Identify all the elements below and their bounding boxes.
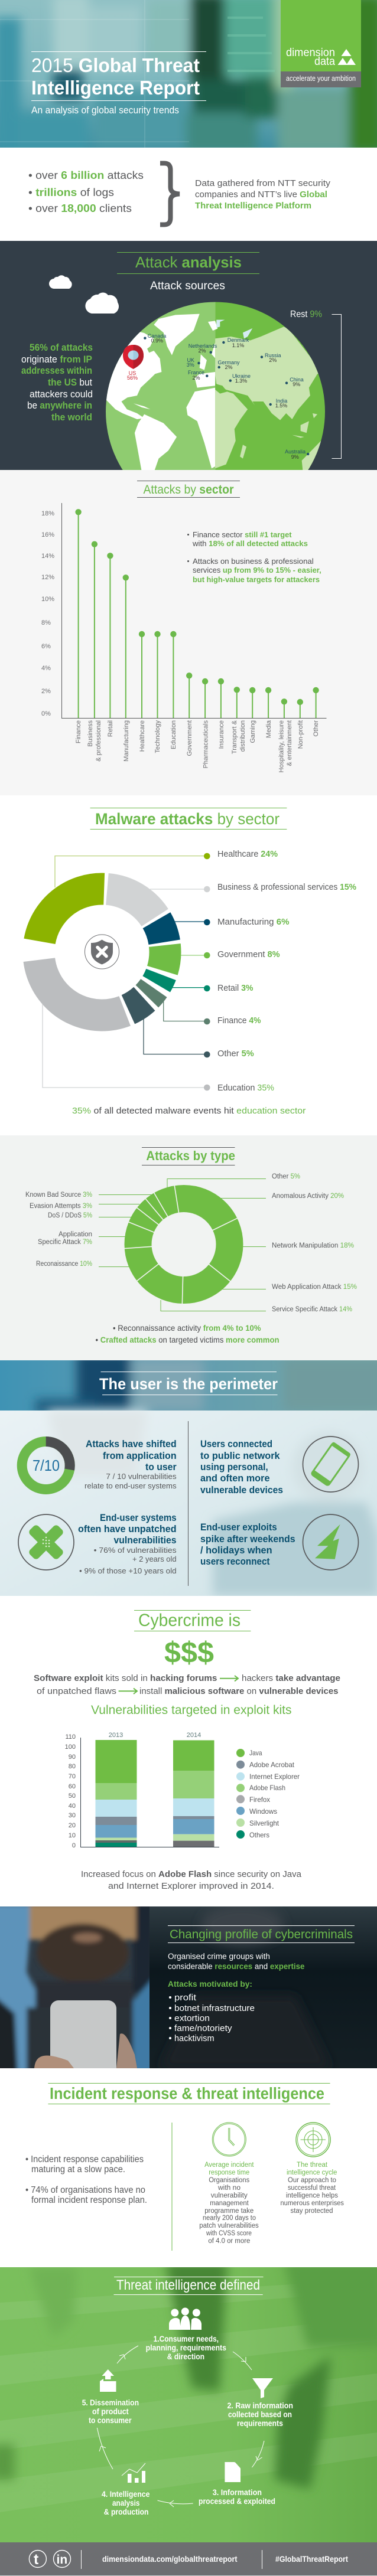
- text: users connected: Users connected: [200, 1439, 272, 1449]
- step 4 text: [102, 2489, 150, 2516]
- text: end-user systems: + 2 years old: [132, 1555, 177, 1563]
- incident bullets: formal incident response plan.: [31, 2195, 147, 2205]
- donut: 7 of 10: [22, 1442, 70, 1489]
- criminals description: [168, 1952, 305, 1989]
- panel: attack analysis background: [0, 241, 377, 470]
- text: attacks have shifted: relate to end-user systems: [84, 1481, 177, 1490]
- world globe map: Ukraine: [232, 373, 251, 379]
- footer bar: #GlobalThreatReport: [275, 2554, 348, 2564]
- cybercrime explanation: install malicious software on vulnerable devices: [139, 1686, 338, 1696]
- text: average incident response time: vulnerability: [211, 2192, 248, 2199]
- malware legend: Other 5%: [217, 1049, 254, 1059]
- text: threat intelligence cycle: intelligence cycle: [287, 2169, 337, 2176]
- world globe map: 9%: [292, 381, 300, 387]
- attack type findings: [96, 1324, 279, 1344]
- step 1 text: planning, requirements: [146, 2343, 226, 2352]
- icon: US location pin: US: [129, 370, 136, 376]
- icon: twitter: t: [34, 2551, 39, 2568]
- lollipop chart: attacks by sector: 4%: [41, 665, 51, 672]
- text: users connected: using personal,: [200, 1462, 268, 1473]
- logo panel: accelerate your ambition: [286, 74, 356, 83]
- world globe map: 9%: [291, 454, 299, 460]
- step 1 text: & direction: [167, 2352, 204, 2361]
- chart legend: Silverlight: [249, 1819, 280, 1827]
- text: average incident response time: response time: [209, 2169, 249, 2176]
- heading: changing profile: Changing profile of cybercriminals: [170, 1927, 353, 1941]
- lollipop chart: attacks by sector: 10%: [41, 596, 54, 603]
- text: end-user systems: [78, 1513, 177, 1575]
- step 2 text: [227, 2401, 293, 2428]
- text: average incident response time: Organisations: [209, 2177, 249, 2184]
- world globe map: France: [188, 370, 204, 376]
- attack type labels: Reconaissance 10%: [36, 1261, 92, 1268]
- map markers: [144, 337, 309, 455]
- stacked bar chart: 10: [69, 1832, 76, 1839]
- stacked bar chart: 40: [69, 1803, 76, 1810]
- icon: US location pin: 56%: [127, 375, 138, 381]
- malware legend: Retail 3%: [217, 983, 253, 993]
- stacked bar chart: 110: [65, 1733, 76, 1741]
- lollipop chart: attacks by sector: & entertainment: [286, 720, 293, 766]
- key data bullets: • trillions of logs: [28, 186, 114, 198]
- icon: US location pin: [123, 345, 144, 381]
- world globe map: 2%: [198, 348, 206, 354]
- panel: cybercriminal dark background: [150, 1904, 377, 2068]
- text: end-user systems: • 9% of those +10 years old: [79, 1566, 177, 1575]
- step 1 text: [146, 2334, 226, 2361]
- step 5 text: of product: [92, 2407, 129, 2416]
- attack type labels: Web Application Attack 15%: [272, 1284, 357, 1291]
- key data bullets: • over 18,000 clients: [28, 202, 132, 214]
- stacked bar chart: 20: [69, 1822, 76, 1829]
- stacked bar chart: 50: [69, 1793, 76, 1800]
- stacked bar chart: 70: [69, 1773, 76, 1780]
- lollipop chart: attacks by sector: Hospitality, leisure: [278, 720, 285, 772]
- sector key findings: with 18% of all detected attacks: [192, 539, 308, 548]
- lollipop chart: attacks by sector: 14%: [41, 553, 54, 560]
- cybercrime explanation: of unpatched flaws: [37, 1686, 116, 1696]
- world globe map: UK: [187, 357, 194, 363]
- attack type labels: Known Bad Source 3%: [25, 1191, 92, 1199]
- lollipop chart: attacks by sector: 12%: [41, 574, 54, 581]
- panel: malware background: [0, 795, 377, 1135]
- logo panel: dimension: [286, 47, 335, 59]
- arrow: step 5 to 1: [117, 2346, 138, 2363]
- icon: shield with cross: [85, 935, 119, 969]
- lollipop chart: attacks by sector: Other: [313, 720, 320, 737]
- lollipop chart: attacks by sector: 18%: [41, 510, 54, 517]
- icon: linkedin: in: [57, 2553, 67, 2567]
- incident bullets: • 74% of organisations have no: [25, 2185, 145, 2195]
- data source text: companies and NTT’s live Global: [195, 190, 327, 200]
- text: average incident response time: Average incident: [204, 2162, 254, 2169]
- cybercrime explanation: Software exploit kits sold in hacking forums: [34, 1673, 217, 1683]
- lollipop chart: attacks by sector: distribution: [239, 720, 246, 752]
- lollipop chart: attacks by sector: 0%: [41, 710, 51, 717]
- heading: attack sources: Attack sources: [150, 280, 225, 292]
- attack type findings: • Reconnaissance activity from 4% to 10%: [113, 1324, 261, 1333]
- sector key findings: but high-value targets for attackers: [193, 575, 320, 584]
- text: end-user systems: End-user systems: [100, 1513, 177, 1523]
- world globe map: India: [276, 398, 287, 404]
- icon: twitter: [29, 2551, 46, 2568]
- world globe map: 2%: [269, 357, 277, 363]
- sector key findings: [187, 530, 321, 584]
- step 2 text: requirements: [237, 2418, 283, 2428]
- heading: attacks by type: Attacks by type: [146, 1148, 235, 1163]
- attack type labels: Other 5%: [272, 1173, 300, 1180]
- text: threat intelligence cycle: The threat: [297, 2162, 328, 2169]
- chart note: Increased focus on Adobe Flash since security on Java: [81, 1869, 302, 1879]
- lollipop chart: attacks by sector: & professional: [95, 720, 102, 762]
- world globe map: Australia: [285, 449, 306, 455]
- step 3 text: [199, 2487, 275, 2506]
- lollipop chart: attacks by sector: Technology: [154, 720, 161, 753]
- motivations list: extortion: [174, 2013, 210, 2023]
- lollipop chart: attacks by sector: Non-profit: [297, 720, 304, 749]
- malware legend: Government 8%: [217, 949, 280, 959]
- icon: people: [169, 2307, 202, 2330]
- motivations list: fame/notoriety: [174, 2023, 232, 2033]
- heading: the user is the perimeter: The user is the perimeter: [99, 1375, 278, 1393]
- text: end-user exploits: End-user exploits: [200, 1522, 277, 1533]
- attack type labels: Specific Attack 7%: [38, 1239, 92, 1246]
- panel: user perimeter background photo: [0, 1352, 377, 1596]
- world globe map: China: [290, 377, 304, 383]
- donut chart: malware by sector: [12, 863, 191, 1041]
- icon: small cloud: [49, 275, 72, 289]
- text: attacks have shifted: [84, 1439, 177, 1490]
- incident bullets: [25, 2154, 147, 2205]
- rest 9% bracket: Rest 9%: [290, 309, 322, 319]
- attack type labels: DoS / DDoS 5%: [48, 1212, 92, 1219]
- motivations list: hacktivism: [174, 2033, 214, 2043]
- step 2 text: 2. Raw information: [227, 2401, 293, 2410]
- world globe map: Canada: [148, 333, 166, 339]
- text: end-user exploits: spike after weekends: [200, 1534, 295, 1545]
- text: users connected: to public network: [200, 1451, 280, 1461]
- divider: [188, 1421, 189, 1586]
- step 5 text: 5. Dissemination: [82, 2398, 139, 2407]
- chart legend: Internet Explorer: [249, 1772, 300, 1781]
- malware legend: Business & professional services 15%: [217, 882, 356, 892]
- data source text: Threat Intelligence Platform: [195, 201, 311, 211]
- lollipop chart: attacks by sector: [41, 503, 326, 772]
- stacked bar chart: 2013: [109, 1732, 123, 1739]
- attack type labels: Evasion Attempts 3%: [30, 1203, 92, 1210]
- step 3 text: processed & exploited: [199, 2496, 275, 2506]
- divider: [171, 2123, 173, 2251]
- icon: dollar signs: $$$: [164, 1636, 214, 1669]
- world globe map: Netherlands: [188, 343, 217, 349]
- sector key findings: Finance sector still #1 target: [193, 530, 292, 539]
- heading: vulnerabilities targeted: Vulnerabilities targeted in exploit kits: [91, 1703, 292, 1717]
- text: threat intelligence cycle: numerous enterprises: [280, 2200, 344, 2207]
- title: Intelligence Report: [31, 77, 200, 99]
- logo panel: data: [314, 55, 335, 68]
- malware legend: Manufacturing 6%: [217, 917, 290, 927]
- chart note: and Internet Explorer improved in 2014.: [108, 1881, 274, 1891]
- lollipop chart: attacks by sector: Business: [87, 720, 94, 747]
- title: [31, 52, 206, 116]
- heading: attack analysis: Attack analysis: [135, 253, 242, 271]
- icon: target: [296, 2123, 330, 2157]
- heading: cybercrime is: Cybercrime is: [138, 1611, 240, 1630]
- stacked bar chart: 60: [69, 1783, 76, 1790]
- stacked bar chart: [65, 1732, 219, 1849]
- arrow: step 1 to 2: [233, 2352, 252, 2370]
- text: attacks have shifted: from application: [103, 1451, 177, 1461]
- sector key findings: Attacks on business & professional: [193, 557, 314, 566]
- criminals description: considerable resources and expertise: [168, 1962, 305, 1971]
- sector key findings: services up from 9% to 15% - easier,: [193, 566, 321, 574]
- chart legend: Firefox: [249, 1795, 270, 1804]
- world globe map: 2%: [225, 364, 233, 370]
- step 5 text: [82, 2398, 139, 2425]
- text: users connected: [200, 1439, 283, 1496]
- lollipop chart: attacks by sector: Insurance: [218, 720, 225, 749]
- lollipop chart: attacks by sector: 8%: [41, 619, 51, 626]
- step 4 text: 4. Intelligence: [102, 2489, 150, 2499]
- text: end-user systems: often have unpatched: [78, 1524, 177, 1535]
- text: average incident response time: [199, 2162, 259, 2245]
- step 4 text: analysis: [112, 2498, 140, 2508]
- key data bullets: • over 6 billion attacks: [28, 169, 144, 181]
- lollipop chart: attacks by sector: Government: [186, 720, 193, 756]
- text: threat intelligence cycle: Our approach to: [288, 2177, 336, 2184]
- chart legend: Adobe Acrobat: [249, 1761, 295, 1769]
- callout: 56% of attacks: addresses within: [21, 365, 92, 376]
- attack type findings: • Crafted attacks on targeted victims more common: [96, 1336, 279, 1344]
- malware legend: [204, 849, 356, 1093]
- text: users connected: and often more: [200, 1473, 269, 1484]
- data source text: Data gathered from NTT security: [195, 179, 331, 188]
- lollipop chart: attacks by sector: Manufacturing: [123, 720, 130, 762]
- chart note: [81, 1869, 302, 1891]
- stacked bar chart: 100: [65, 1744, 76, 1751]
- donut chart: attacks by type: [99, 1178, 266, 1311]
- icon: upload box: [100, 2369, 116, 2392]
- text: attacks have shifted: Attacks have shifted: [86, 1439, 177, 1449]
- text: users connected: vulnerable devices: [200, 1485, 283, 1496]
- leader lines: [43, 856, 207, 1088]
- callout: 56% of attacks: the US but: [48, 377, 92, 388]
- lollipop chart: attacks by sector: Pharmaceuticals: [202, 720, 209, 768]
- text: average incident response time: programme take: [204, 2208, 254, 2215]
- step 2 text: collected based on: [228, 2410, 292, 2419]
- cybercrime explanation: hackers take advantage: [242, 1673, 340, 1683]
- arrow: step 3 to 4: [157, 2500, 193, 2507]
- panel: cybercriminal photo: [0, 1906, 150, 2068]
- text: end-user exploits: users reconnect: [200, 1556, 270, 1567]
- text: average incident response time: management: [210, 2200, 249, 2207]
- panel: attacks by sector background: [0, 470, 377, 795]
- title: An analysis of global security trends: [31, 105, 179, 116]
- step 1 text: 1.Consumer needs,: [154, 2334, 219, 2343]
- attack type labels: [25, 1173, 357, 1313]
- world globe map: Denmark: [228, 337, 249, 343]
- attack type labels: Application: [58, 1231, 92, 1238]
- world globe map: [106, 302, 325, 470]
- lollipop chart: attacks by sector: Education: [170, 720, 177, 749]
- lollipop chart: attacks by sector: Retail: [107, 720, 114, 737]
- lollipop chart: attacks by sector: Healthcare: [139, 720, 146, 752]
- icon: lightning bolt: [303, 1514, 358, 1570]
- criminals description: Attacks motivated by:: [168, 1979, 252, 1989]
- motivations list: [169, 1993, 255, 2043]
- footer bar: [0, 2542, 377, 2576]
- heading: attack analysis: [117, 253, 259, 274]
- world globe map: 1.1%: [232, 342, 244, 348]
- callout: 56% of attacks: [21, 342, 93, 423]
- text: threat intelligence cycle: intelligence helps: [286, 2192, 338, 2199]
- text: average incident response time: of 4.0 or more: [208, 2238, 250, 2245]
- icon: analytics chart: [122, 2463, 145, 2483]
- donut: 7 of 10: 7/10: [32, 1457, 60, 1474]
- heading: malware attacks by sector: Malware attacks by sector: [95, 810, 280, 828]
- icon: large cloud: [85, 292, 119, 314]
- icon: document: [225, 2462, 240, 2482]
- world globe map: Germany: [217, 360, 240, 365]
- cybercrime explanation: [34, 1673, 340, 1696]
- footer bar: dimensiondata.com/globalthreatreport: [102, 2554, 238, 2564]
- chart legend: Windows: [249, 1807, 277, 1816]
- step 4 text: & production: [104, 2507, 149, 2516]
- chart legend: Others: [249, 1831, 269, 1839]
- incident bullets: • Incident response capabilities: [25, 2154, 144, 2164]
- world globe map: 3%: [187, 362, 194, 368]
- text: end-user systems: • 76% of vulnerabilities: [94, 1546, 177, 1555]
- malware legend: Healthcare 24%: [217, 849, 278, 859]
- text: end-user systems: vulnerabilities: [113, 1535, 176, 1546]
- callout: 56% of attacks: attackers could: [30, 389, 93, 400]
- icon: funnel: [252, 2378, 273, 2398]
- chart legend: [236, 1749, 300, 1839]
- arrow: step 4 to 5: [97, 2428, 113, 2469]
- world globe map: Russia: [265, 352, 281, 358]
- lollipop chart: attacks by sector: Finance: [75, 720, 82, 743]
- motivations list: botnet infrastructure: [174, 2003, 255, 2013]
- text: attacks have shifted: to user: [145, 1462, 177, 1473]
- icon: smartphone: [303, 1436, 358, 1492]
- stacked bar chart: 90: [69, 1754, 76, 1761]
- text: average incident response time: nearly 200 days to: [203, 2215, 256, 2222]
- icon: curly brace: [160, 163, 180, 224]
- text: threat intelligence cycle: successful threat: [288, 2185, 336, 2192]
- callout: 56% of attacks: be anywhere in: [27, 400, 92, 411]
- panel: attacks by type background: [0, 1135, 377, 1360]
- lollipop chart: attacks by sector: Media: [265, 720, 272, 738]
- lollipop chart: attacks by sector: Transport &: [231, 720, 238, 754]
- malware takeaway: 35% of all detected malware events hit education sector: [72, 1106, 306, 1116]
- stacked bar chart: 0: [72, 1842, 76, 1849]
- world globe map: 1.3%: [235, 378, 247, 384]
- stacked bar chart: 80: [69, 1763, 76, 1770]
- attack type labels: Anomalous Activity 20%: [272, 1193, 344, 1200]
- icon: linkedin: [53, 2551, 71, 2567]
- attack type labels: Network Manipulation 18%: [272, 1242, 354, 1249]
- chart legend: Adobe Flash: [249, 1784, 285, 1792]
- text: threat intelligence cycle: stay protected: [291, 2208, 333, 2215]
- data source text: [195, 179, 331, 211]
- attack type labels: Service Specific Attack 14%: [272, 1306, 352, 1313]
- callout: 56% of attacks: the world: [51, 412, 92, 423]
- rest 9% bracket: [290, 309, 342, 458]
- lollipop chart: attacks by sector: 2%: [41, 688, 51, 695]
- stacked bar chart: 30: [69, 1812, 76, 1819]
- step 5 text: to consumer: [89, 2415, 132, 2425]
- stacked bar chart: 2014: [187, 1732, 201, 1739]
- heading: incident response: Incident response & threat intelligence: [50, 2084, 324, 2102]
- criminals description: Organised crime groups with: [168, 1952, 270, 1961]
- chart legend: Java: [249, 1749, 262, 1757]
- icon: bandage in circle: [18, 1514, 74, 1570]
- text: end-user exploits: [200, 1522, 295, 1567]
- lollipop chart: attacks by sector: Gaming: [249, 720, 256, 743]
- callout: 56% of attacks: 56% of attacks: [30, 342, 93, 353]
- step 3 text: 3. Information: [213, 2487, 262, 2497]
- malware legend: Finance 4%: [217, 1016, 261, 1026]
- world globe map: 0.9%: [151, 338, 163, 344]
- malware legend: Education 35%: [217, 1083, 274, 1093]
- key data bullets: [28, 169, 144, 214]
- logo panel: [281, 0, 361, 87]
- text: average incident response time: with CVSS score: [206, 2230, 252, 2237]
- panel: threat intelligence background photo: [0, 2261, 377, 2542]
- lollipop chart: attacks by sector: 16%: [41, 531, 54, 538]
- text: average incident response time: with no: [217, 2185, 240, 2192]
- motivations list: profit: [174, 1993, 197, 2003]
- arrow: step 2 to 3: [252, 2441, 264, 2467]
- lollipop chart: attacks by sector: 6%: [41, 643, 51, 650]
- heading: threat intelligence defined: Threat intelligence defined: [116, 2277, 260, 2293]
- title: 2015 Global Threat: [31, 54, 200, 76]
- incident bullets: maturing at a slow pace.: [31, 2164, 125, 2175]
- world globe map: 1.5%: [275, 403, 287, 409]
- callout: 56% of attacks: originate from IP: [21, 354, 92, 365]
- header banner photo: [0, 0, 377, 154]
- text: attacks have shifted: 7 / 10 vulnerabilities: [106, 1472, 177, 1481]
- heading: attacks by sector: Attacks by sector: [143, 483, 234, 497]
- text: threat intelligence cycle: [280, 2162, 344, 2215]
- text: average incident response time: patch vulnerabilities: [199, 2222, 259, 2229]
- text: end-user exploits: / holidays when: [200, 1545, 272, 1556]
- icon: clock: [212, 2123, 246, 2156]
- world globe map: 2%: [192, 375, 200, 381]
